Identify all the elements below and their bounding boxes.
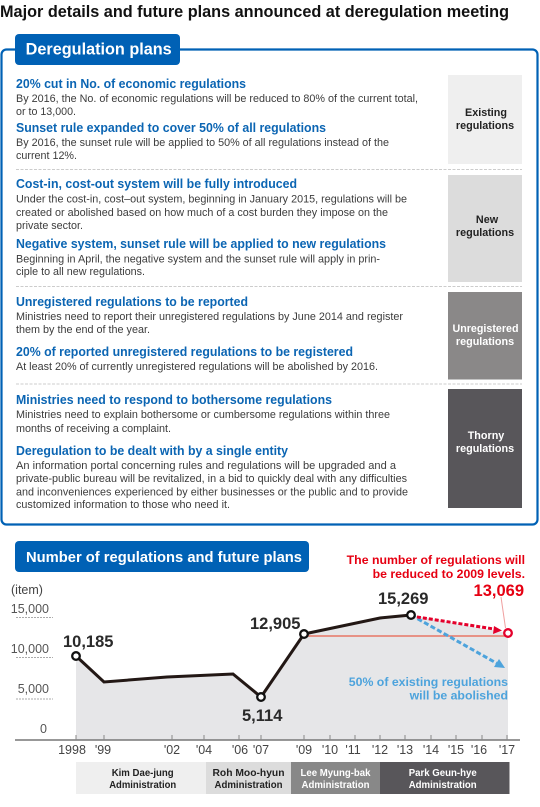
section: unregistered regulations text: Unregistered regulations to be reported (16, 294, 248, 309)
y axis labels: 15,000 (11, 602, 49, 616)
x axis: '02 (164, 743, 180, 757)
Kim Dae-jung: Administration (109, 779, 176, 791)
section: existing regulations text: By 2016, the sunset rule will be applied to 50% of all regulations instead of the (16, 137, 389, 149)
label box: thorny regulations (448, 389, 522, 508)
blue dashed projection arrow (411, 615, 505, 668)
section: thorny regulations text: and inconveniences experienced by either businesses or the public and to provide (16, 486, 408, 498)
x axis: '11 (345, 743, 361, 757)
value labels: 5,114 (242, 707, 283, 725)
x axis: 1998 (58, 743, 86, 757)
x axis: '99 (95, 743, 111, 757)
y axis labels (11, 583, 53, 736)
x axis (15, 735, 520, 757)
label box: unregistered regulations: Unregistered (452, 323, 518, 335)
x axis: '10 (322, 743, 338, 757)
section: unregistered regulations text (16, 294, 403, 373)
line chart: number of regulations (11, 553, 525, 757)
callout: red forecast: 13,069 (474, 582, 524, 600)
section: unregistered regulations text: Ministries need to report their unregistered regulations by June 2014 and register (16, 311, 403, 323)
x axis: '15 (448, 743, 464, 757)
section: thorny regulations text (16, 392, 408, 511)
section: new regulations text: private sector. (16, 220, 83, 232)
x axis: '12 (372, 743, 388, 757)
Kim Dae-jung: Kim Dae-jung (112, 767, 174, 779)
callout: blue forecast: will be abolished (409, 688, 508, 702)
2009 level reference line (304, 635, 508, 637)
label box: thorny regulations: Thorny (468, 430, 504, 442)
Park Geun-hye: Park Geun-hye (409, 767, 477, 779)
shaded area (76, 615, 508, 740)
y axis labels: (item) (11, 583, 43, 597)
label box: existing regulations: regulations (456, 120, 514, 132)
value labels: 15,269 (378, 590, 428, 608)
label box: new regulations: regulations (456, 227, 514, 239)
label box: existing regulations: Existing (465, 107, 507, 119)
data points (72, 611, 512, 701)
section: unregistered regulations text: 20% of reported unregistered regulations to be registered (16, 344, 353, 359)
Roh Moo-hyun: Administration (214, 779, 282, 791)
y axis labels: 5,000 (18, 682, 49, 696)
title: Major details and future plans announced at deregulation meeting (0, 3, 509, 21)
callout: red forecast: be reduced to 2009 levels. (373, 567, 525, 581)
section: thorny regulations text: months of receiving a complaint. (16, 423, 171, 435)
x axis: '17 (499, 743, 515, 757)
callout: red forecast (347, 553, 525, 600)
x axis: '06 (232, 743, 248, 757)
section: new regulations text: Cost-in, cost-out system will be fully introduced (16, 176, 297, 191)
heading tab: deregulation plans: Deregulation plans (26, 40, 172, 58)
section: new regulations text (16, 176, 407, 278)
section: thorny regulations text: private-public bureau will be revitalized, in a bid to quickly deal with any difficulties (16, 473, 407, 485)
value labels: 10,185 (63, 633, 113, 651)
Park Geun-hye (380, 762, 510, 794)
y axis labels: 0 (40, 722, 47, 736)
Park Geun-hye: Administration (409, 779, 477, 791)
label box: new regulations (448, 175, 522, 282)
section: thorny regulations text: An information portal concerning rules and regulations will be upgraded and a (16, 460, 397, 472)
x axis: '13 (397, 743, 413, 757)
section: new regulations text: created or abolished based on how much of a cost burden they impose on the (16, 207, 388, 219)
leader line to 13,069 (501, 597, 506, 628)
section: existing regulations text: current 12%. (16, 150, 77, 162)
value labels: 12,905 (250, 615, 300, 633)
Kim Dae-jung (76, 762, 206, 794)
section: new regulations text: Under the cost-in, cost–out system, beginning in January 2015, regulations will be (16, 194, 407, 206)
section: thorny regulations text: Ministries need to respond to bothersome regulations (16, 392, 332, 407)
Lee Myung-bak: Lee Myung-bak (300, 767, 371, 779)
x axis: '16 (471, 743, 487, 757)
x axis: '04 (196, 743, 212, 757)
section: existing regulations text: Sunset rule expanded to cover 50% of all regulations (16, 120, 326, 135)
section: new regulations text: Beginning in April, the negative system and the sunset rule will apply in prin- (16, 254, 380, 266)
callout: blue forecast: 50% of existing regulations (349, 675, 508, 689)
Lee Myung-bak (291, 762, 380, 794)
section: existing regulations text: 20% cut in No. of economic regulations (16, 76, 246, 91)
section: thorny regulations text: customized information to those who need it. (16, 499, 230, 511)
section: thorny regulations text: Deregulation to be dealt with by a single entity (16, 443, 289, 458)
value labels (63, 590, 428, 725)
section: thorny regulations text: Ministries need to explain bothersome or cumbersome regulations within three (16, 409, 390, 421)
heading tab: number of regulations: Number of regulations and future plans (26, 549, 302, 566)
y axis labels: 10,000 (11, 642, 49, 656)
x axis: '14 (423, 743, 439, 757)
callout: red forecast: The number of regulations will (347, 553, 525, 567)
heading tab: deregulation plans (15, 34, 180, 65)
red dashed projection arrow (411, 616, 502, 634)
section: new regulations text: Negative system, sunset rule will be applied to new regulations (16, 236, 386, 251)
Roh Moo-hyun (206, 762, 291, 794)
section: existing regulations text (16, 76, 418, 162)
label box: unregistered regulations: regulations (456, 336, 514, 348)
panel: deregulation plans (2, 34, 538, 524)
label box: existing regulations (448, 75, 522, 164)
section: existing regulations text: By 2016, the No. of economic regulations will be reduced to 80% of the current total, (16, 93, 418, 105)
heading tab: number of regulations (15, 541, 309, 572)
data line (76, 615, 411, 697)
label box: thorny regulations: regulations (456, 443, 514, 455)
label box: unregistered regulations (448, 292, 522, 380)
section: unregistered regulations text: them by the end of the year. (16, 324, 150, 336)
Lee Myung-bak: Administration (302, 779, 370, 791)
section: unregistered regulations text: At least 20% of currently unregistered regulations will be abolished by 2016. (16, 361, 378, 373)
x axis: '07 (253, 743, 269, 757)
callout: blue forecast (349, 675, 508, 702)
x axis: '09 (296, 743, 312, 757)
section: existing regulations text: or to 13,000. (16, 106, 76, 118)
administration bars (76, 762, 510, 794)
label box: new regulations: New (476, 214, 499, 226)
Roh Moo-hyun: Roh Moo-hyun (212, 767, 284, 779)
section: new regulations text: ciple to all new regulations. (16, 266, 145, 278)
